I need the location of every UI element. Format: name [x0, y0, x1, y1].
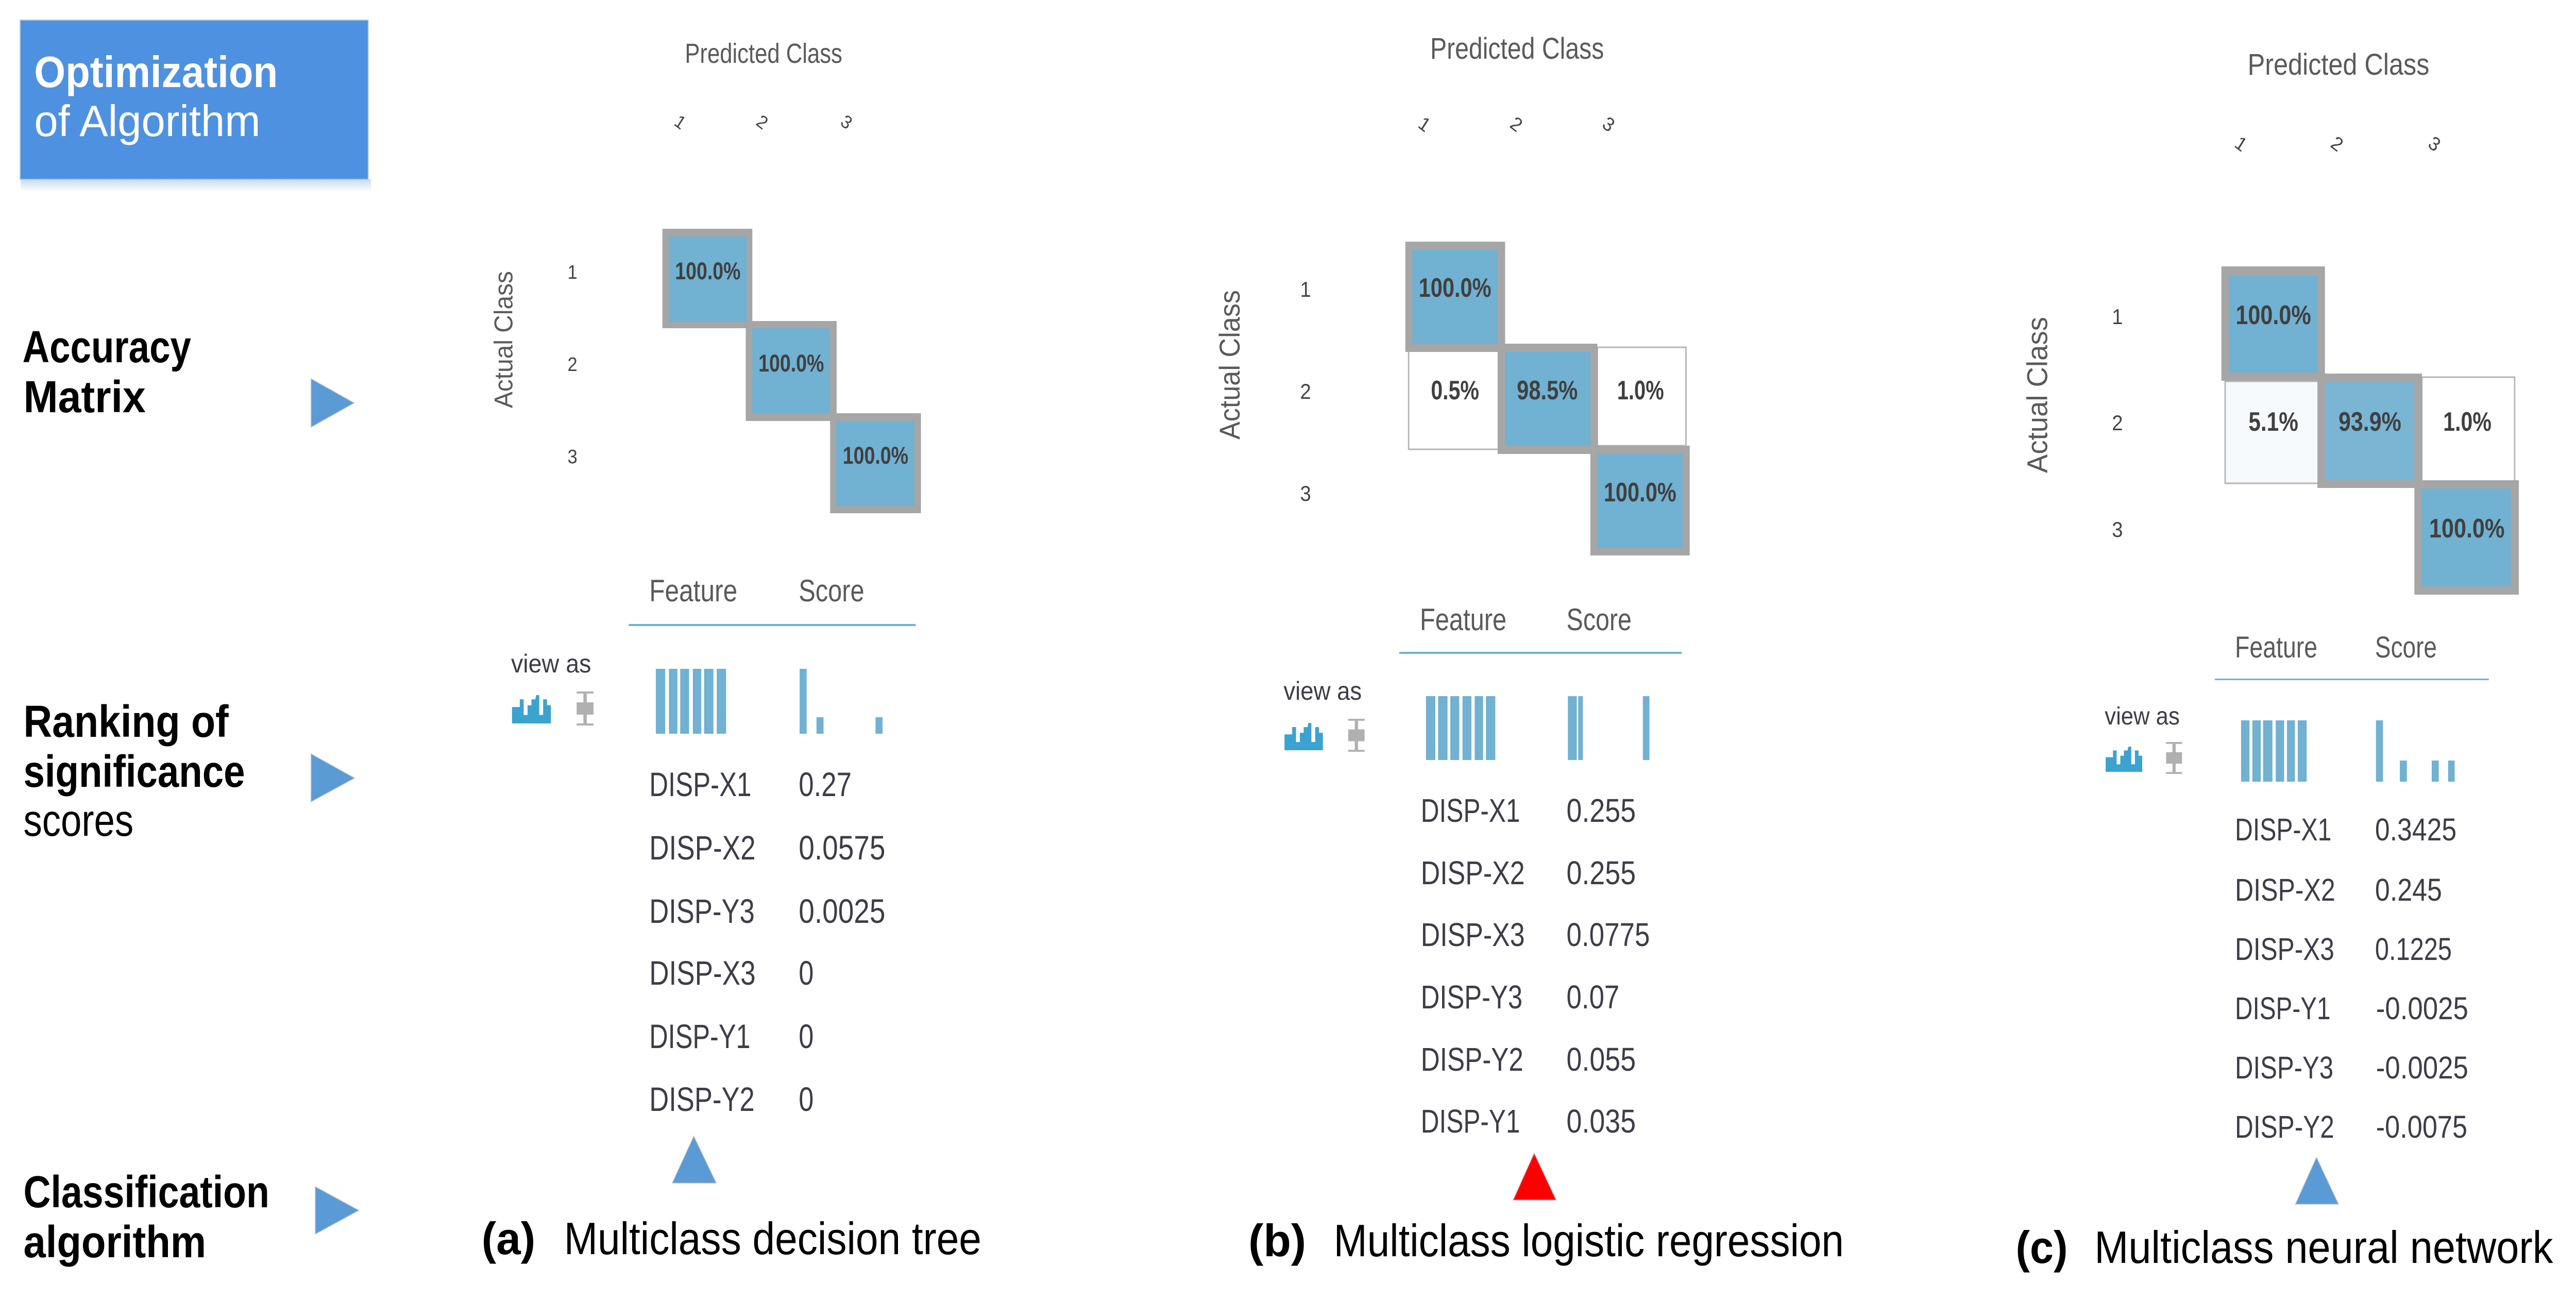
feature score table c	[2105, 631, 2489, 1145]
feature score table b: DISP-Y1	[1421, 1103, 1520, 1140]
accuracy matrix a: Actual Class	[489, 271, 518, 408]
row label: Classification algorithm: Classification	[23, 1167, 269, 1217]
feature score table a	[511, 574, 916, 1119]
feature score table c: DISP-Y1	[2235, 991, 2331, 1026]
up arrow b: red highlight	[1513, 1153, 1556, 1200]
feature score table c: -0.0075	[2376, 1110, 2467, 1145]
accuracy matrix c: 3	[2112, 517, 2123, 542]
accuracy matrix b: 100.0%	[1604, 477, 1676, 508]
accuracy matrix a: 1	[671, 111, 689, 133]
accuracy matrix c: 1	[2112, 305, 2123, 329]
feature score table c: DISP-X3	[2235, 932, 2334, 967]
row label: Ranking of significance scores: significance	[23, 747, 245, 797]
accuracy matrix c: 1	[2231, 131, 2251, 156]
accuracy matrix b: 1.0%	[1617, 375, 1664, 406]
feature score table c: DISP-X2	[2235, 873, 2335, 908]
feature score table b: Feature	[1420, 603, 1506, 637]
title box: Optimization of Algorithm	[20, 20, 371, 192]
feature score table c: Score	[2375, 631, 2437, 664]
feature score table a: view as	[511, 650, 591, 679]
accuracy matrix c: 100.0%	[2235, 300, 2311, 330]
feature score table a: 0	[799, 1018, 814, 1056]
feature score table b: DISP-Y2	[1421, 1041, 1523, 1078]
accuracy matrix c	[2022, 48, 2519, 595]
accuracy matrix a: 100.0%	[758, 349, 824, 377]
accuracy matrix a: 100.0%	[675, 257, 741, 284]
caption b: (b)	[1248, 1215, 1306, 1266]
feature score table c: 0.3425	[2375, 813, 2456, 848]
accuracy matrix c: Predicted Class	[2248, 48, 2429, 81]
row label: Classification algorithm: algorithm	[23, 1217, 206, 1267]
feature score table a: DISP-X1	[649, 766, 751, 804]
feature score table b: 0.035	[1567, 1103, 1636, 1140]
accuracy matrix b: Predicted Class	[1430, 32, 1604, 65]
accuracy matrix a: 2	[568, 353, 578, 375]
feature score table a: Feature	[649, 574, 737, 609]
feature score table c: 0.1225	[2375, 932, 2452, 967]
feature score table a: DISP-Y1	[649, 1018, 751, 1056]
feature score table b: Score	[1567, 603, 1632, 637]
row label: Ranking of significance scores	[23, 697, 245, 846]
row label: Accuracy Matrix: Matrix	[23, 372, 146, 422]
accuracy matrix b	[1214, 32, 1690, 555]
caption c: (c)	[2016, 1222, 2067, 1273]
up arrow c	[2295, 1157, 2338, 1204]
feature score table c: view as	[2105, 702, 2180, 730]
feature score table a: 0	[799, 1081, 814, 1119]
panel b: multiclass logistic regression	[1214, 32, 1844, 1266]
feature score table a: Score	[799, 574, 865, 609]
feature score table b: view as	[1283, 677, 1362, 706]
accuracy matrix c: 5.1%	[2248, 407, 2298, 437]
feature score table b: 0.0775	[1567, 916, 1650, 953]
accuracy matrix a: 1	[568, 261, 578, 283]
feature score table a: DISP-Y2	[649, 1081, 755, 1119]
accuracy matrix b: Actual Class	[1214, 290, 1246, 440]
row label: Accuracy Matrix: Accuracy	[23, 322, 191, 372]
feature score table a: 0.27	[799, 766, 852, 804]
feature score table c: -0.0025	[2376, 991, 2468, 1026]
accuracy matrix c: 93.9%	[2338, 407, 2401, 437]
row label: Accuracy Matrix	[23, 322, 191, 422]
feature score table b: 0.07	[1567, 979, 1619, 1016]
panel a: multiclass decision tree	[482, 38, 981, 1264]
accuracy matrix a: 100.0%	[843, 442, 908, 469]
feature score table b: DISP-X3	[1421, 916, 1525, 953]
accuracy matrix a: 3	[568, 445, 578, 467]
feature score table c: DISP-X1	[2235, 813, 2331, 848]
accuracy matrix b: 1	[1300, 277, 1311, 301]
accuracy matrix c: 2	[2327, 131, 2347, 156]
accuracy matrix b: 3	[1300, 481, 1311, 505]
accuracy matrix c: 1.0%	[2443, 407, 2492, 437]
accuracy matrix b: 100.0%	[1419, 273, 1492, 303]
title box: Optimization of Algorithm: Optimization	[34, 48, 278, 97]
feature score table c: -0.0025	[2376, 1051, 2468, 1086]
feature score table c: 0.245	[2375, 873, 2442, 908]
feature score table a: DISP-X3	[649, 954, 756, 992]
feature score table b: DISP-Y3	[1421, 979, 1522, 1016]
feature score table c: DISP-Y2	[2235, 1110, 2334, 1145]
caption c: Multiclass neural network	[2094, 1222, 2553, 1273]
feature score table b	[1283, 603, 1682, 1140]
feature score table b: DISP-X1	[1421, 792, 1520, 829]
row label: Ranking of significance scores: scores	[23, 796, 133, 846]
feature score table b: DISP-X2	[1421, 854, 1525, 891]
caption a: (a)	[482, 1213, 535, 1264]
feature score table b: 0.255	[1567, 792, 1636, 829]
arrow: accuracy matrix row	[311, 379, 354, 427]
accuracy matrix a: Predicted Class	[685, 38, 842, 69]
accuracy matrix a: 2	[753, 111, 771, 133]
accuracy matrix a: 3	[837, 111, 856, 133]
accuracy matrix c: 3	[2425, 131, 2444, 156]
accuracy matrix b: 1	[1415, 112, 1434, 137]
accuracy matrix c: 100.0%	[2429, 513, 2504, 544]
row label: Classification algorithm	[23, 1167, 269, 1267]
accuracy matrix a	[489, 38, 921, 513]
feature score table a: 0	[799, 954, 814, 992]
feature score table b: 0.055	[1567, 1041, 1636, 1078]
row label: Ranking of significance scores: Ranking of	[23, 697, 229, 747]
accuracy matrix c: Actual Class	[2022, 317, 2054, 473]
accuracy matrix b: 2	[1506, 112, 1526, 137]
feature score table a: DISP-Y3	[649, 892, 755, 931]
up arrow a	[672, 1136, 716, 1183]
caption a: Multiclass decision tree	[564, 1213, 981, 1264]
accuracy matrix c: 2	[2112, 411, 2123, 435]
feature score table c: Feature	[2235, 631, 2317, 664]
feature score table b: 0.255	[1567, 854, 1636, 891]
panel c: multiclass neural network	[2016, 48, 2553, 1273]
feature score table a: 0.0025	[799, 892, 885, 931]
arrow: classification row	[315, 1187, 359, 1234]
feature score table a: DISP-X2	[649, 829, 756, 867]
accuracy matrix b: 2	[1300, 379, 1311, 403]
accuracy matrix b: 3	[1599, 112, 1618, 137]
caption b: Multiclass logistic regression	[1334, 1215, 1844, 1266]
accuracy matrix b: 0.5%	[1431, 375, 1479, 406]
accuracy matrix b: 98.5%	[1517, 375, 1578, 406]
arrow: ranking row	[311, 754, 354, 802]
title box: Optimization of Algorithm: of Algorithm	[34, 97, 261, 146]
feature score table c: DISP-Y3	[2235, 1051, 2333, 1086]
feature score table a: 0.0575	[799, 829, 885, 867]
